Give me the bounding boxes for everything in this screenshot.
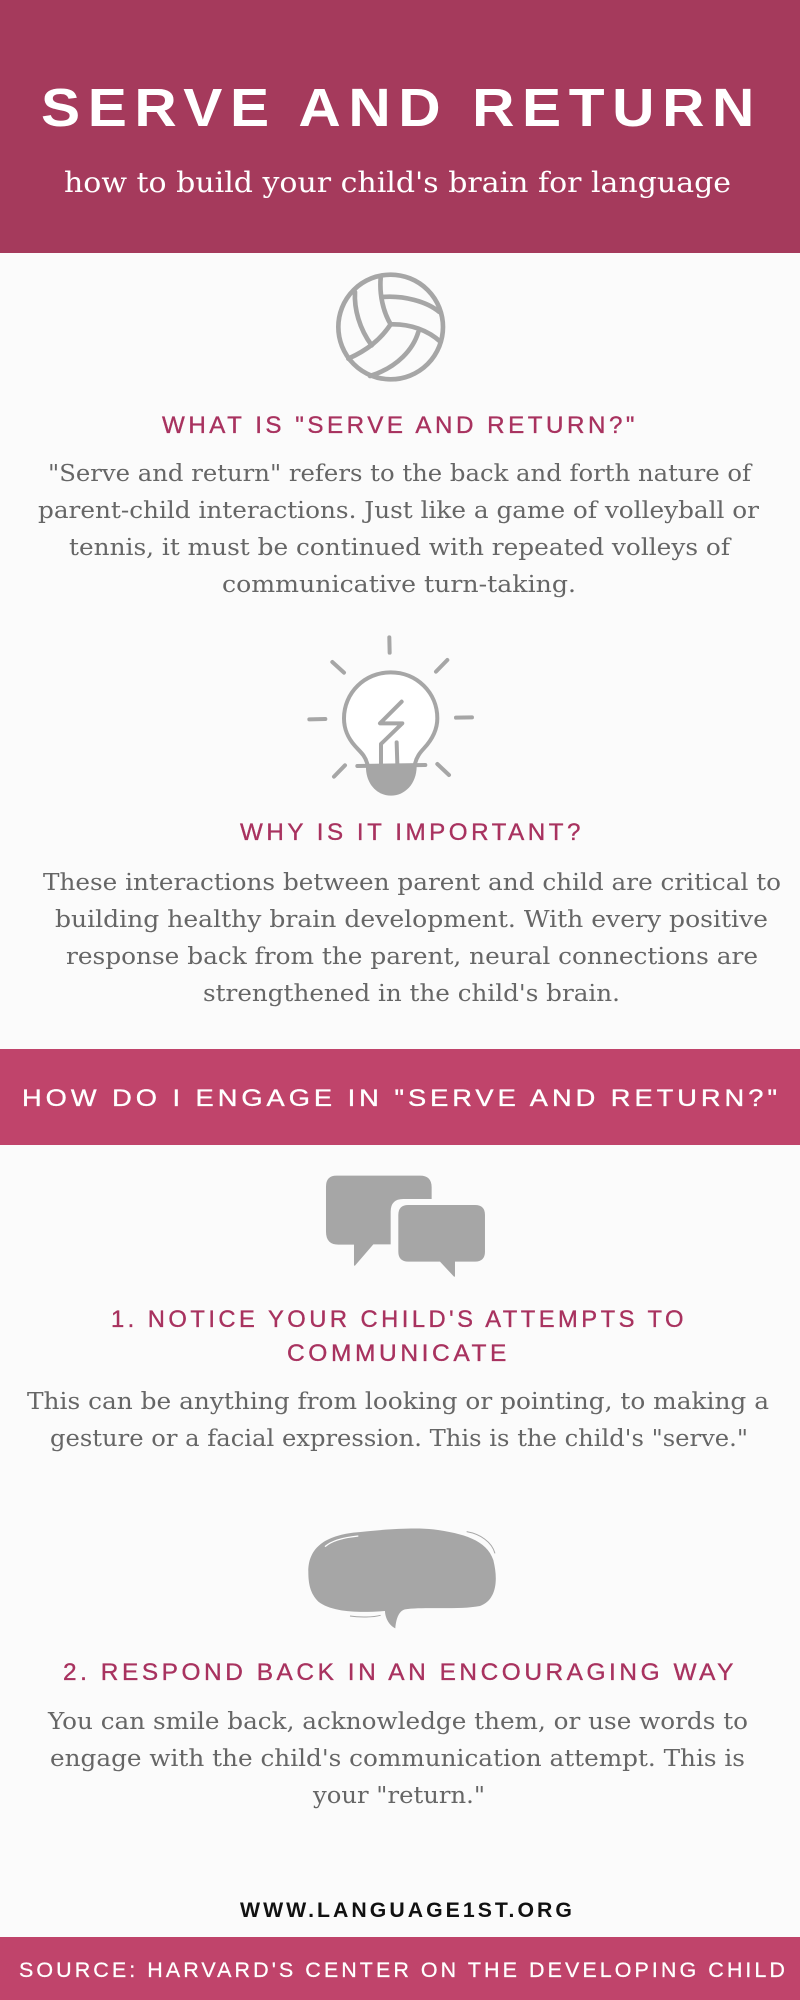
heading: step 1: COMMUNICATE (287, 1340, 510, 1367)
heading: why is it important: WHY IS IT IMPORTANT? (240, 819, 584, 846)
icon: volleyball (338, 275, 443, 379)
heading: step 2: 2. RESPOND BACK IN AN ENCOURAGING WAY (63, 1659, 737, 1686)
section band: how do I engage: HOW DO I ENGAGE IN "SERVE AND RETURN?" (22, 1085, 781, 1112)
text block: why it matters: These interactions between parent and child are critical to (43, 870, 781, 896)
heading: step 1 (111, 1306, 687, 1367)
text block: step 2: You can smile back, acknowledge them, or use words to (47, 1709, 748, 1735)
title: SERVE AND RETURN (41, 78, 762, 138)
text block: why it matters: response back from the parent, neural connections are (66, 944, 758, 970)
footer: source (0, 1937, 800, 2000)
text block: serve and return definition: "Serve and return" refers to the back and forth nature of (48, 461, 753, 487)
text block: serve and return definition: tennis, it must be continued with repeated volleys of (69, 535, 732, 561)
text block: step 2: engage with the child's communication attempt. This is (50, 1746, 745, 1772)
text block: step 1: gesture or a facial expression. This is the child's "serve." (50, 1426, 748, 1452)
text block: step 1 (27, 1389, 769, 1452)
text block: serve and return definition (38, 461, 759, 598)
footer: source: SOURCE: HARVARD'S CENTER ON THE DEVELOPING CHILD (19, 1959, 788, 1982)
heading: what is serve and return: WHAT IS "SERVE AND RETURN?" (162, 412, 638, 439)
website link: WWW.LANGUAGE1ST.ORG (240, 1899, 575, 1922)
text block: step 2 (47, 1709, 748, 1809)
heading: step 1: 1. NOTICE YOUR CHILD'S ATTEMPTS TO (111, 1306, 687, 1333)
icon: chat bubbles (326, 1176, 485, 1277)
subtitle: how to build your child's brain for language (64, 166, 731, 199)
icon: speech bubble (308, 1529, 496, 1628)
section band: how do I engage (0, 1049, 800, 1145)
icon: light bulb (309, 637, 472, 796)
text block: why it matters: strengthened in the child's brain. (203, 981, 620, 1007)
header banner (0, 0, 800, 253)
text block: step 1: This can be anything from looking or pointing, to making a (27, 1389, 769, 1415)
text block: serve and return definition: communicative turn-taking. (222, 572, 576, 598)
text block: step 2: your "return." (312, 1783, 485, 1809)
text block: serve and return definition: parent-child interactions. Just like a game of volleyball or (38, 498, 759, 524)
text block: why it matters (43, 870, 781, 1007)
text block: why it matters: building healthy brain development. With every positive (55, 907, 768, 933)
